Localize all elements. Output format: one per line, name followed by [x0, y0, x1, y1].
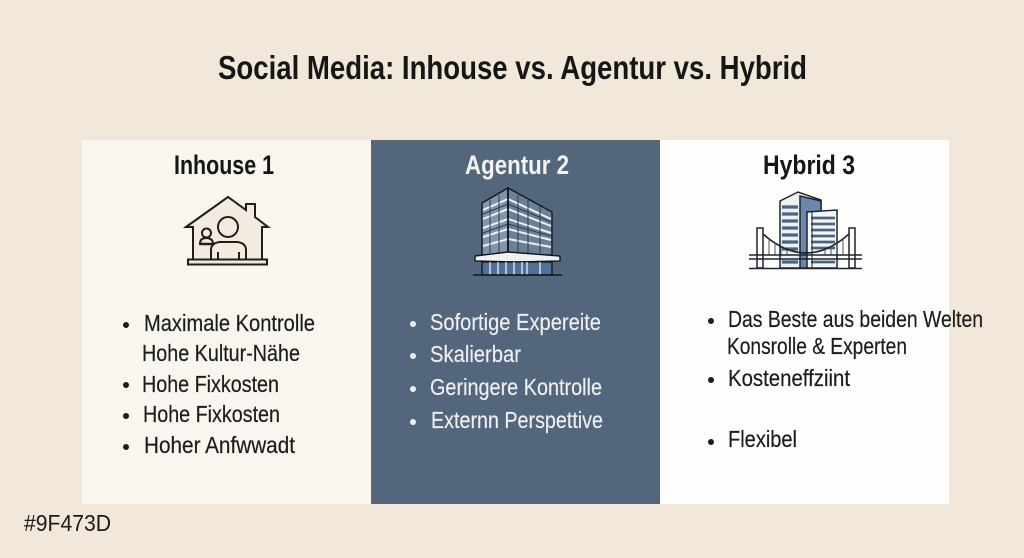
list: Inhouse points: Hohe Fixkosten — [142, 371, 279, 397]
list: Inhouse points: Hoher Anfwwadt — [144, 432, 296, 458]
heading: Hybrid 3: Hybrid 3 — [763, 150, 855, 180]
list: Hybrid points: Flexibel — [728, 426, 797, 452]
icon: house with people — [186, 197, 268, 264]
list: Inhouse points: Hohe Fixkosten — [143, 401, 280, 427]
heading: Inhouse 1: Inhouse 1 — [174, 150, 274, 180]
panel: Agentur — [371, 140, 660, 504]
icon: buildings and bridge — [749, 192, 862, 268]
list: Agentur points — [410, 309, 603, 433]
panel: Inhouse — [82, 140, 371, 504]
list: Inhouse points: Maximale Kontrolle — [144, 310, 315, 336]
heading: Agentur 2: Agentur 2 — [465, 150, 569, 180]
list: Hybrid points — [708, 306, 983, 452]
list: Inhouse points — [123, 310, 315, 458]
title: Social Media: Inhouse vs. Agentur vs. Hybrid — [218, 49, 807, 86]
list: Hybrid points: Kosteneffziint — [728, 365, 851, 391]
list: Agentur points: Externn Perspettive — [431, 407, 603, 433]
list: Agentur points: Geringere Kontrolle — [430, 374, 602, 400]
panel: Hybrid — [660, 140, 983, 504]
hex code label: #9F473D — [24, 510, 111, 536]
list: Agentur points: Skalierbar — [430, 341, 521, 367]
list: Hybrid points: Das Beste aus beiden Welten — [728, 306, 983, 332]
list: Hybrid points: Konsrolle & Experten — [727, 333, 907, 359]
list: Agentur points: Sofortige Expereite — [430, 309, 601, 335]
icon: office building — [473, 188, 562, 275]
list: Inhouse points: Hohe Kultur-Nähe — [142, 340, 300, 366]
